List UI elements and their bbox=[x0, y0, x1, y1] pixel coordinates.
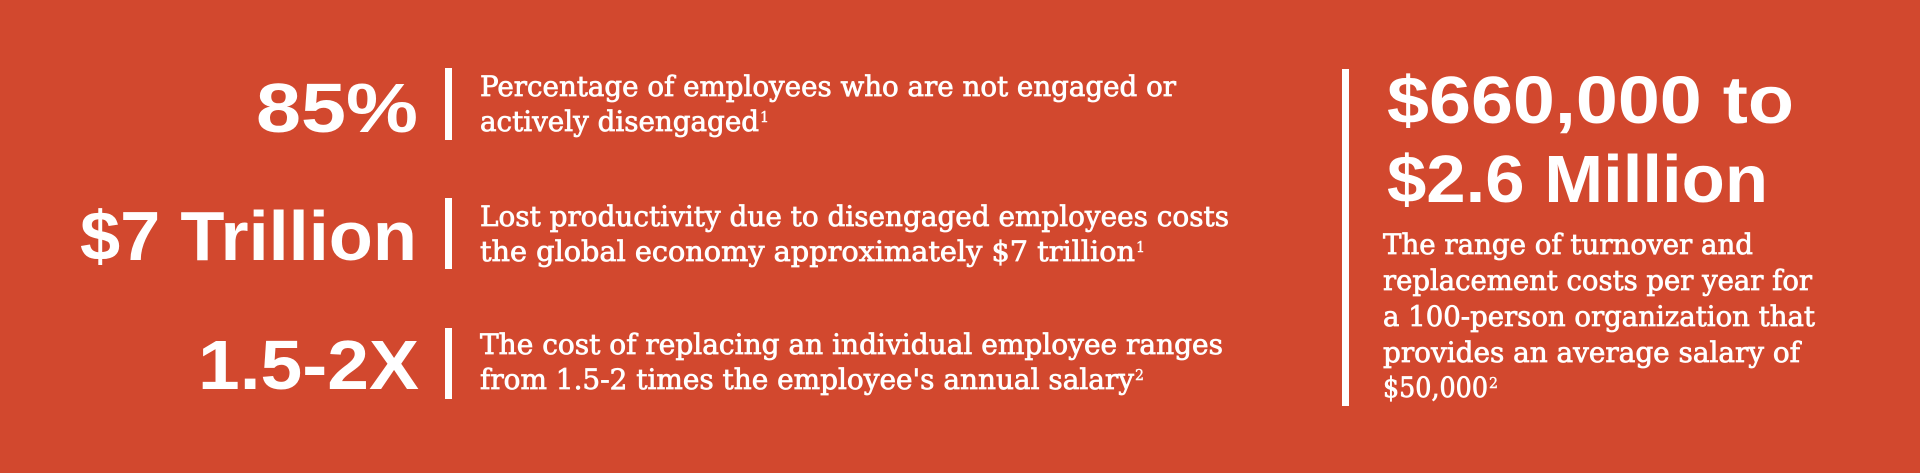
vertical bar bbox=[445, 328, 452, 399]
figure: $7 Trillion: $7 Trillion bbox=[80, 197, 417, 275]
vertical bar bbox=[1342, 69, 1349, 406]
vertical bar bbox=[445, 198, 452, 269]
figure: $660,000 to $2.6 Million: $2.6 Million bbox=[1387, 142, 1768, 217]
description: turnover range bbox=[1383, 228, 1816, 404]
description: lost productivity: 1 bbox=[1136, 238, 1145, 256]
stat row: 85% bbox=[256, 68, 1177, 147]
description: replacement cost: 2 bbox=[1135, 366, 1144, 384]
description: replacement cost: from 1.5-2 times the employee's annual salary bbox=[480, 363, 1134, 396]
description: not engaged: Percentage of employees who are not engaged or bbox=[480, 70, 1177, 103]
right panel: turnover cost bbox=[1342, 63, 1816, 406]
description: lost productivity: the global economy approximately $7 trillion bbox=[480, 235, 1135, 268]
description: turnover range: The range of turnover and bbox=[1383, 228, 1753, 261]
description: turnover range: provides an average salary of bbox=[1383, 336, 1803, 369]
figure: 1.5-2X: 1.5-2X bbox=[198, 326, 419, 404]
description: lost productivity: Lost productivity due to disengaged employees costs bbox=[480, 200, 1229, 233]
description: lost productivity bbox=[480, 200, 1229, 268]
description: turnover range: a 100-person organization that bbox=[1383, 300, 1816, 333]
figure: 85%: 85% bbox=[256, 69, 418, 147]
vertical bar bbox=[445, 68, 452, 140]
description: not engaged: 1 bbox=[760, 108, 769, 126]
description: not engaged: actively disengaged bbox=[480, 105, 759, 138]
description: replacement cost bbox=[480, 328, 1223, 396]
description: replacement cost: The cost of replacing an individual employee ranges bbox=[480, 328, 1223, 361]
stat row: $7 Trillion bbox=[80, 197, 1229, 275]
stat row: 1.5-2X bbox=[198, 326, 1223, 404]
description: turnover range: $50,000 bbox=[1383, 371, 1488, 404]
figure: $660,000 to $2.6 Million bbox=[1387, 63, 1794, 217]
description: turnover range: replacement costs per year for bbox=[1383, 264, 1813, 297]
figure: $660,000 to $2.6 Million: $660,000 to bbox=[1387, 63, 1794, 138]
description: turnover range: 2 bbox=[1489, 374, 1498, 392]
description: not engaged bbox=[480, 70, 1177, 138]
